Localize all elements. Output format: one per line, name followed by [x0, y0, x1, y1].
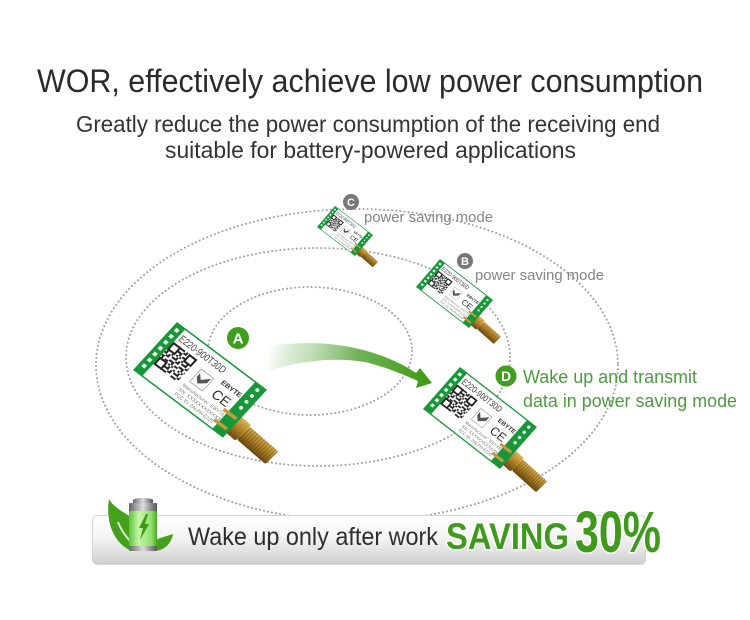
badge D: D [501, 368, 511, 384]
saving text: SAVING [446, 516, 569, 557]
module B [416, 259, 517, 346]
module A: SN: XXXXXXXXXXXX [176, 387, 222, 423]
label B: power saving mode [475, 268, 604, 284]
module B: E220-900T30D [440, 266, 471, 292]
module C: FCC ID: 2ALPH-E220 [334, 236, 352, 251]
module A: EBYTE [219, 380, 243, 399]
module A: Manufacturer: EBYTE [181, 383, 227, 419]
subtitle: Greatly reduce the power consumption of the receiving end [76, 111, 660, 137]
30 percent: 30% [575, 500, 661, 565]
module B: SN: XXXXXXXXXXXX [441, 297, 468, 319]
dotted range ellipses [96, 209, 618, 521]
module A: CE [208, 386, 235, 410]
module D: E220-900T30D [460, 377, 505, 414]
module C [317, 206, 390, 269]
label C: power saving mode [364, 210, 493, 226]
module D [423, 367, 571, 496]
banner [92, 500, 661, 565]
label D [523, 367, 737, 411]
badge A: A [233, 330, 244, 348]
badge A [227, 327, 249, 349]
module C: SN: XXXXXXXXXXXX [335, 235, 354, 250]
module B: CE [460, 298, 475, 312]
module D: Manufacturer: EBYTE [464, 420, 503, 451]
module A: E220-900T30D [176, 334, 228, 376]
module D: SN: XXXXXXXXXXXX [461, 424, 499, 455]
badge C: C [347, 197, 355, 209]
module B: Manufacturer: EBYTE [444, 295, 471, 316]
badge C [343, 194, 359, 210]
module D: EBYTE [496, 418, 516, 435]
subtitle [76, 111, 660, 163]
module D: FCC ID: 2ALPH-E220 [457, 428, 494, 457]
module B: FCC ID: 2ALPH-E220 [439, 300, 465, 320]
module A [133, 322, 307, 468]
badge B [457, 253, 473, 269]
arrow from A to D [267, 343, 432, 388]
label D: data in power saving mode [523, 391, 737, 411]
module C: Manufacturer: EBYTE [337, 232, 357, 248]
module C: EBYTE [353, 230, 364, 239]
module C: CE [348, 235, 359, 244]
module C: E220-900T30D [335, 211, 357, 229]
module B: EBYTE [466, 293, 480, 305]
badge B: B [461, 256, 469, 268]
badge D [496, 366, 516, 386]
module A: FCC ID: 2ALPH-E220 [172, 392, 215, 425]
title: WOR, effectively achieve low power consumption [37, 63, 703, 99]
subtitle: suitable for battery-powered applications [165, 137, 576, 163]
label D: Wake up and transmit [523, 367, 697, 387]
icon: battery with leaves [108, 498, 173, 551]
banner caption: Wake up only after work [188, 523, 438, 551]
module D: CE [487, 424, 509, 445]
